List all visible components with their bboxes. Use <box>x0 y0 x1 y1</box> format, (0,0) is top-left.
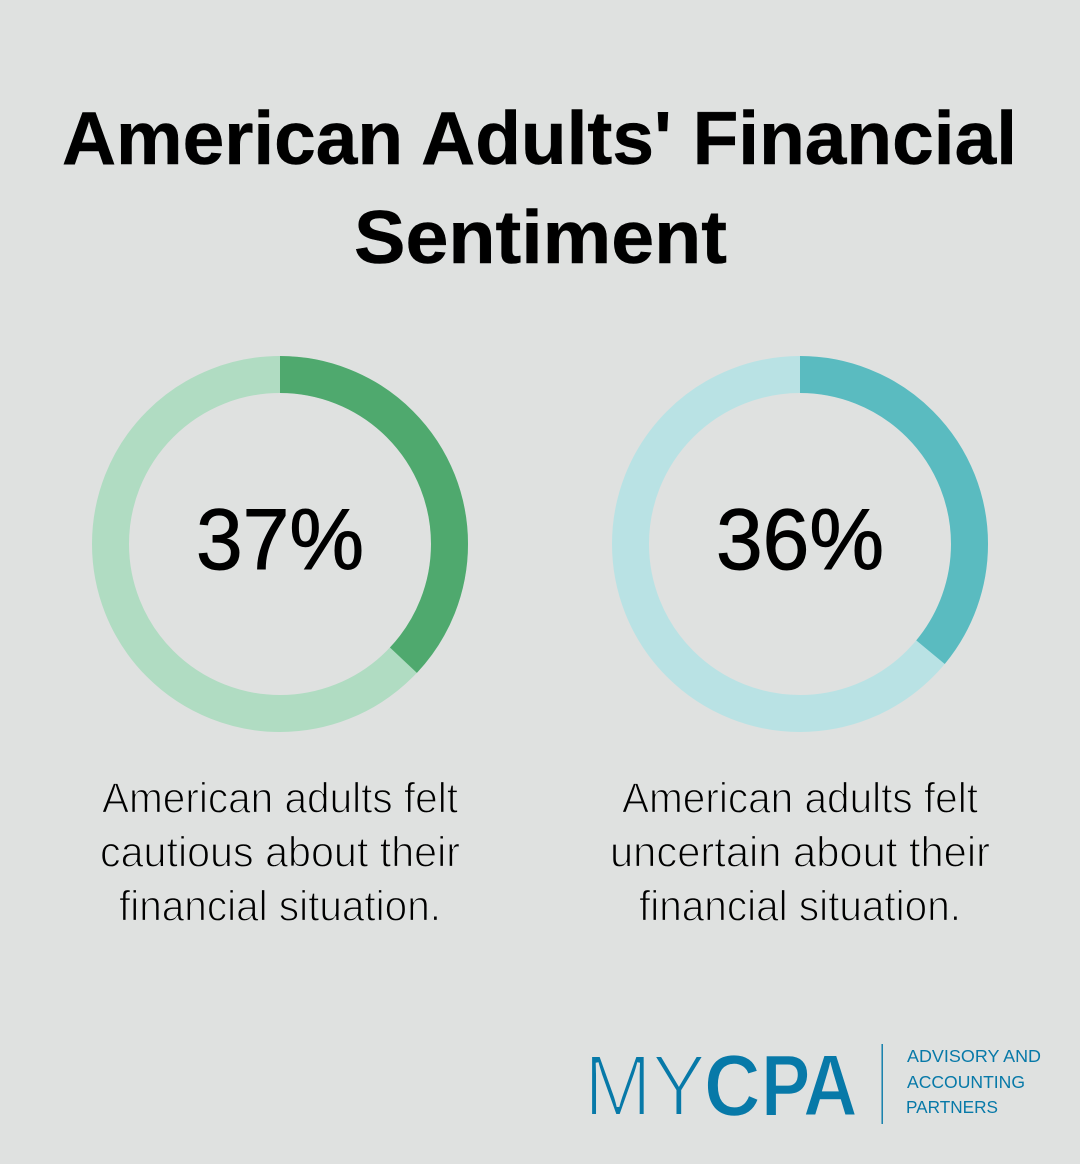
panel: uncertain <box>610 374 990 930</box>
title: American Adults' Financial <box>62 96 1017 180</box>
logo tagline <box>906 1046 1041 1117</box>
panel: cautious <box>100 374 460 930</box>
logo divider <box>882 1044 883 1124</box>
caption: uncertain: American adults felt <box>622 774 978 822</box>
title <box>62 96 1017 279</box>
donut chart: 37% <box>110 374 450 714</box>
stat: 37%: 37% <box>196 492 364 588</box>
logo wordmark: C <box>704 1037 761 1134</box>
stat: 36%: 36% <box>716 492 884 588</box>
logo wordmark: A <box>803 1038 858 1135</box>
logo wordmark: MY <box>584 1038 706 1134</box>
logo tagline: ACCOUNTING <box>907 1072 1025 1092</box>
caption: cautious: American adults felt <box>102 774 458 822</box>
caption: uncertain <box>610 774 990 930</box>
logo wordmark <box>584 1037 858 1135</box>
caption: cautious: financial situation. <box>119 882 441 930</box>
logo tagline: ADVISORY AND <box>907 1046 1041 1066</box>
logo wordmark: P <box>761 1038 810 1135</box>
caption: uncertain: uncertain about their <box>610 828 990 876</box>
donut chart: 36% <box>630 374 970 714</box>
caption: cautious <box>100 774 460 930</box>
caption: uncertain: financial situation. <box>639 882 961 930</box>
logo tagline: PARTNERS <box>906 1097 998 1117</box>
caption: cautious: cautious about their <box>100 828 460 876</box>
logo: MYCPA <box>584 1037 1041 1135</box>
title: Sentiment <box>354 195 727 279</box>
